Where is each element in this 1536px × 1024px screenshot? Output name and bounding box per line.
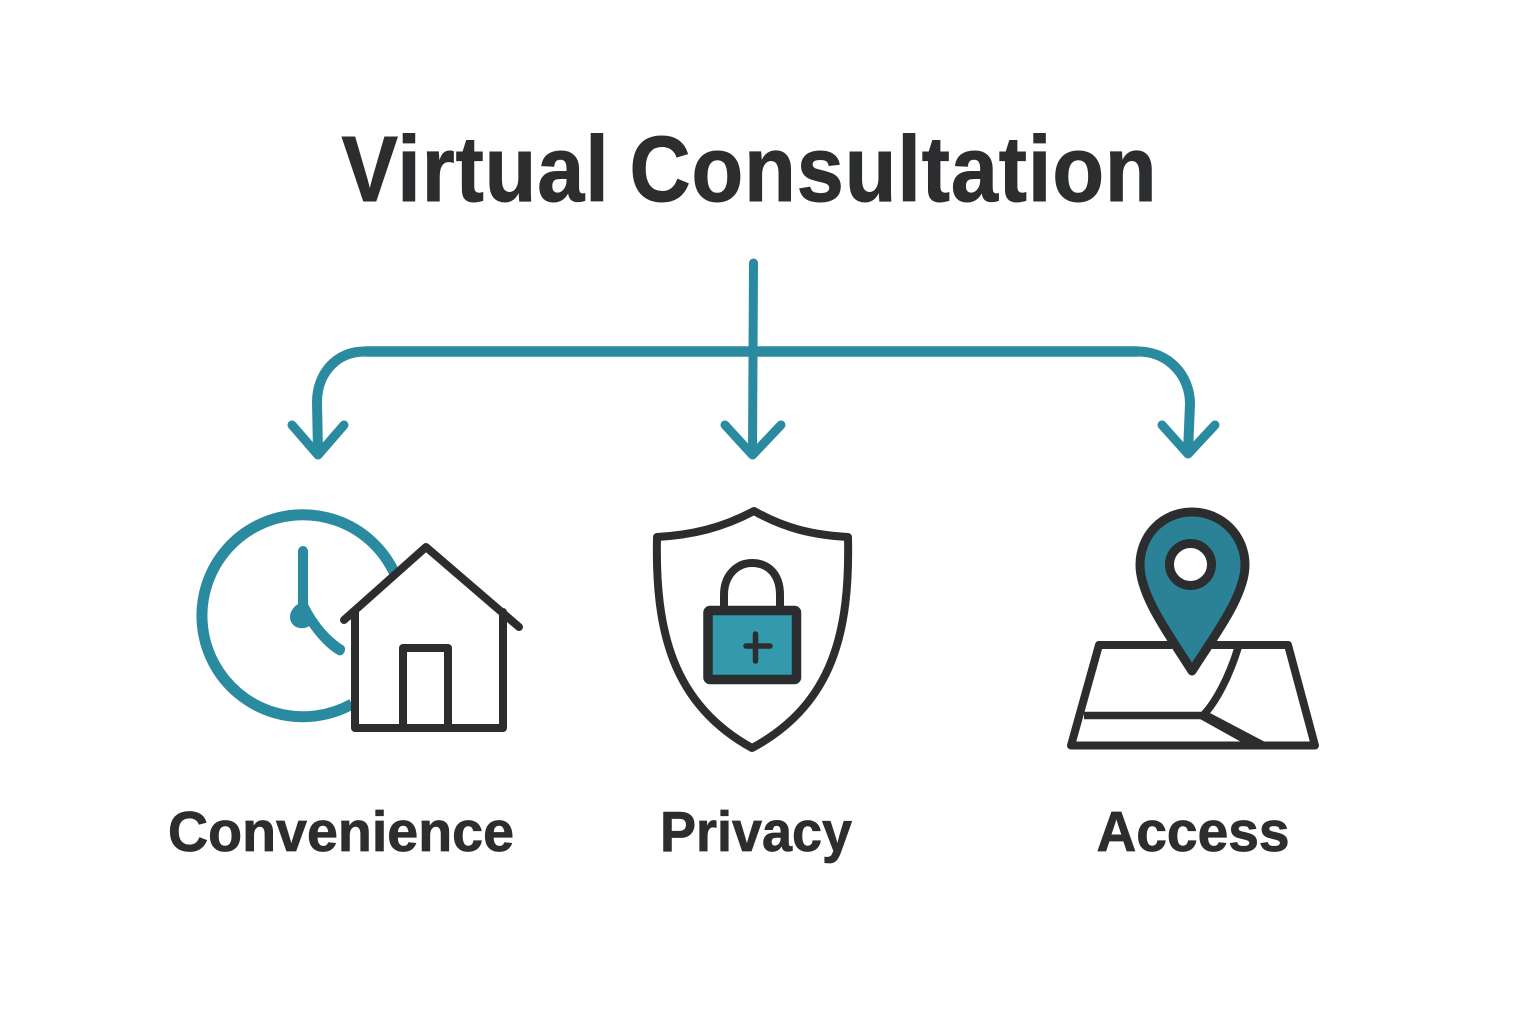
lock body bbox=[708, 610, 796, 680]
clock face bbox=[202, 515, 394, 717]
label: Convenience: Convenience bbox=[168, 800, 514, 864]
icon: shield with lock bbox=[657, 511, 848, 748]
label: Access: Access bbox=[1096, 800, 1290, 864]
house door bbox=[403, 648, 448, 728]
shield bbox=[657, 511, 848, 748]
lock shackle bbox=[724, 563, 780, 607]
arrow: right to access bbox=[753, 352, 1215, 454]
icon: clock and house bbox=[202, 515, 519, 728]
label: Privacy: Privacy bbox=[660, 800, 852, 864]
map bbox=[1071, 645, 1315, 746]
branching arrows bbox=[292, 263, 1215, 455]
arrow: left to convenience bbox=[292, 352, 753, 455]
pin hole bbox=[1170, 544, 1212, 586]
clock hands bbox=[290, 551, 345, 655]
title: Virtual Consultation bbox=[341, 117, 1158, 221]
icon: map with location pin bbox=[1071, 512, 1315, 746]
arrow: center to privacy bbox=[725, 263, 781, 455]
location pin bbox=[1140, 512, 1245, 671]
map roads bbox=[1084, 648, 1267, 743]
lock plus sign bbox=[746, 634, 770, 661]
house bbox=[344, 547, 519, 728]
